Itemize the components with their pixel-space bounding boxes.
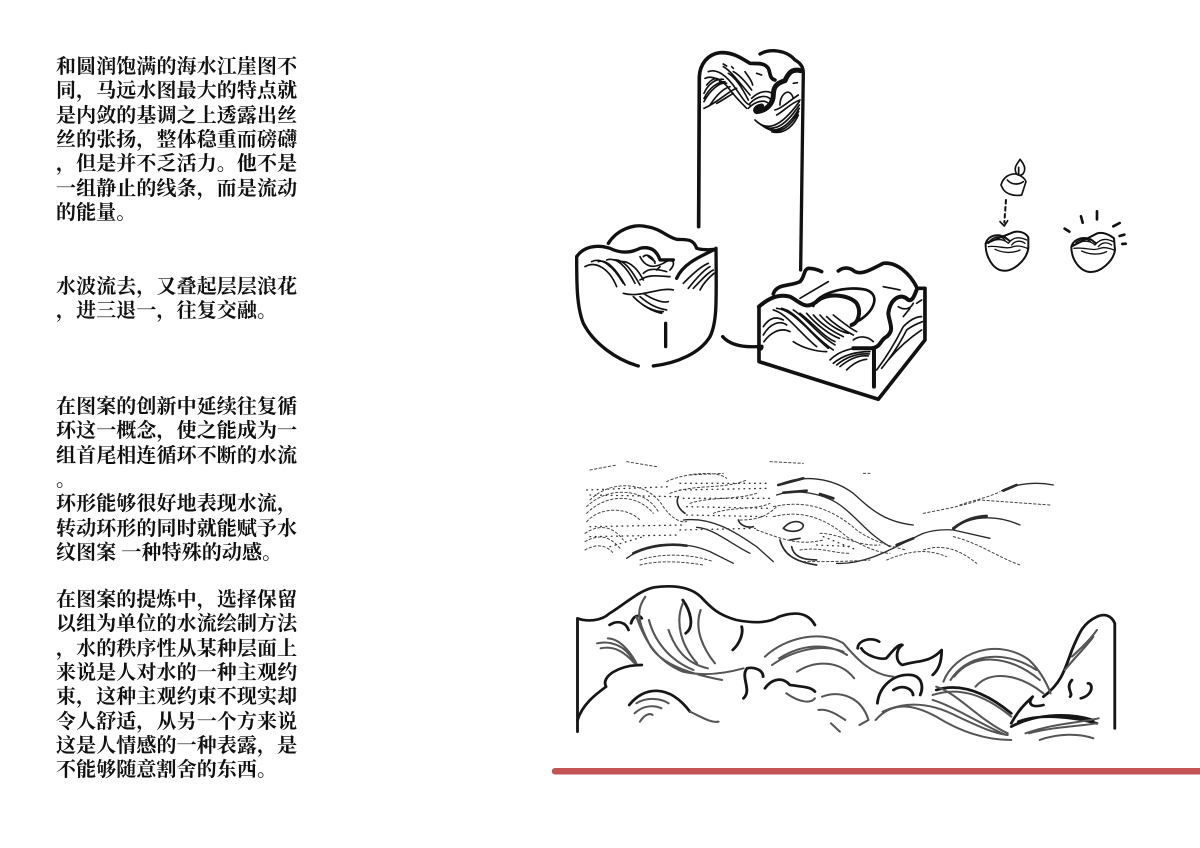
- text block: waves: ，进三退一，往复交融。: [56, 300, 277, 322]
- icon: candle dropping onto stamp: [986, 159, 1126, 272]
- text block: refinement: 这是人情感的一种表露，是: [56, 735, 297, 757]
- text block: loop concept: 环这一概念，使之能成为一: [56, 420, 297, 442]
- icon: candle: [1001, 159, 1026, 195]
- text block: refinement: 以组为单位的水流绘制方法: [56, 613, 297, 635]
- illustration: three carved stamps: [577, 51, 925, 399]
- stamp: tall pillar: [699, 51, 803, 270]
- black outline strokes: [577, 586, 1115, 732]
- red baseline bar: [552, 768, 1200, 774]
- text block: intro: 丝的张扬，整体稳重而磅礴: [56, 129, 297, 151]
- fine stippled lines: [585, 462, 1050, 565]
- stamp: square block: [759, 263, 925, 399]
- text block: loop concept: 组首尾相连循环不断的水流: [56, 445, 297, 467]
- text block: intro: 一组静止的线条，而是流动: [56, 178, 297, 200]
- illustration: ink print waves: [585, 462, 1053, 565]
- illustration: redrawn pencil waves: [577, 586, 1115, 740]
- text block: refinement: 不能够随意割舍的东西。: [56, 759, 277, 781]
- text block: waves: 水波流去，又叠起层层浪花: [56, 276, 297, 298]
- stamp: round cup: [577, 226, 757, 366]
- text block: intro: 同，马远水图最大的特点就: [56, 80, 297, 102]
- gray flow lines: [597, 597, 1099, 740]
- text block: refinement: [56, 588, 297, 781]
- text block: refinement: 令人舒适，从另一个方来说: [56, 711, 297, 733]
- text block: loop concept: 环形能够很好地表现水流，: [56, 493, 297, 515]
- stippled dots: [587, 483, 857, 550]
- icon: small cup: [986, 232, 1028, 271]
- text block: intro: 是内敛的基调之上透露出丝: [56, 105, 297, 127]
- arrow: dashed down: [1004, 200, 1006, 223]
- text block: intro: ，但是并不乏活力。他不是: [56, 153, 297, 175]
- text block: loop concept: 在图案的创新中延续往复循: [56, 396, 297, 418]
- text block: intro: 和圆润饱满的海水江崖图不: [56, 56, 297, 78]
- icon: glowing small cup: [1065, 211, 1126, 272]
- text block: loop concept: 。: [56, 469, 76, 491]
- text block: refinement: ，水的秩序性从某种层面上: [56, 638, 297, 660]
- text block: refinement: 在图案的提炼中，选择保留: [56, 589, 297, 611]
- text block: refinement: 束，这种主观约束不现实却: [56, 686, 297, 708]
- thick strokes: [627, 478, 1053, 565]
- text block: intro: 的能量。: [56, 202, 136, 224]
- text block: waves: [56, 276, 297, 322]
- text block: loop concept: 转动环形的同时就能赋予水: [56, 518, 297, 540]
- text block: loop concept: [56, 396, 297, 564]
- text block: intro: [56, 56, 297, 224]
- text block: loop concept: 纹图案 一种特殊的动感。: [56, 542, 282, 564]
- text block: refinement: 来说是人对水的一种主观约: [56, 662, 297, 684]
